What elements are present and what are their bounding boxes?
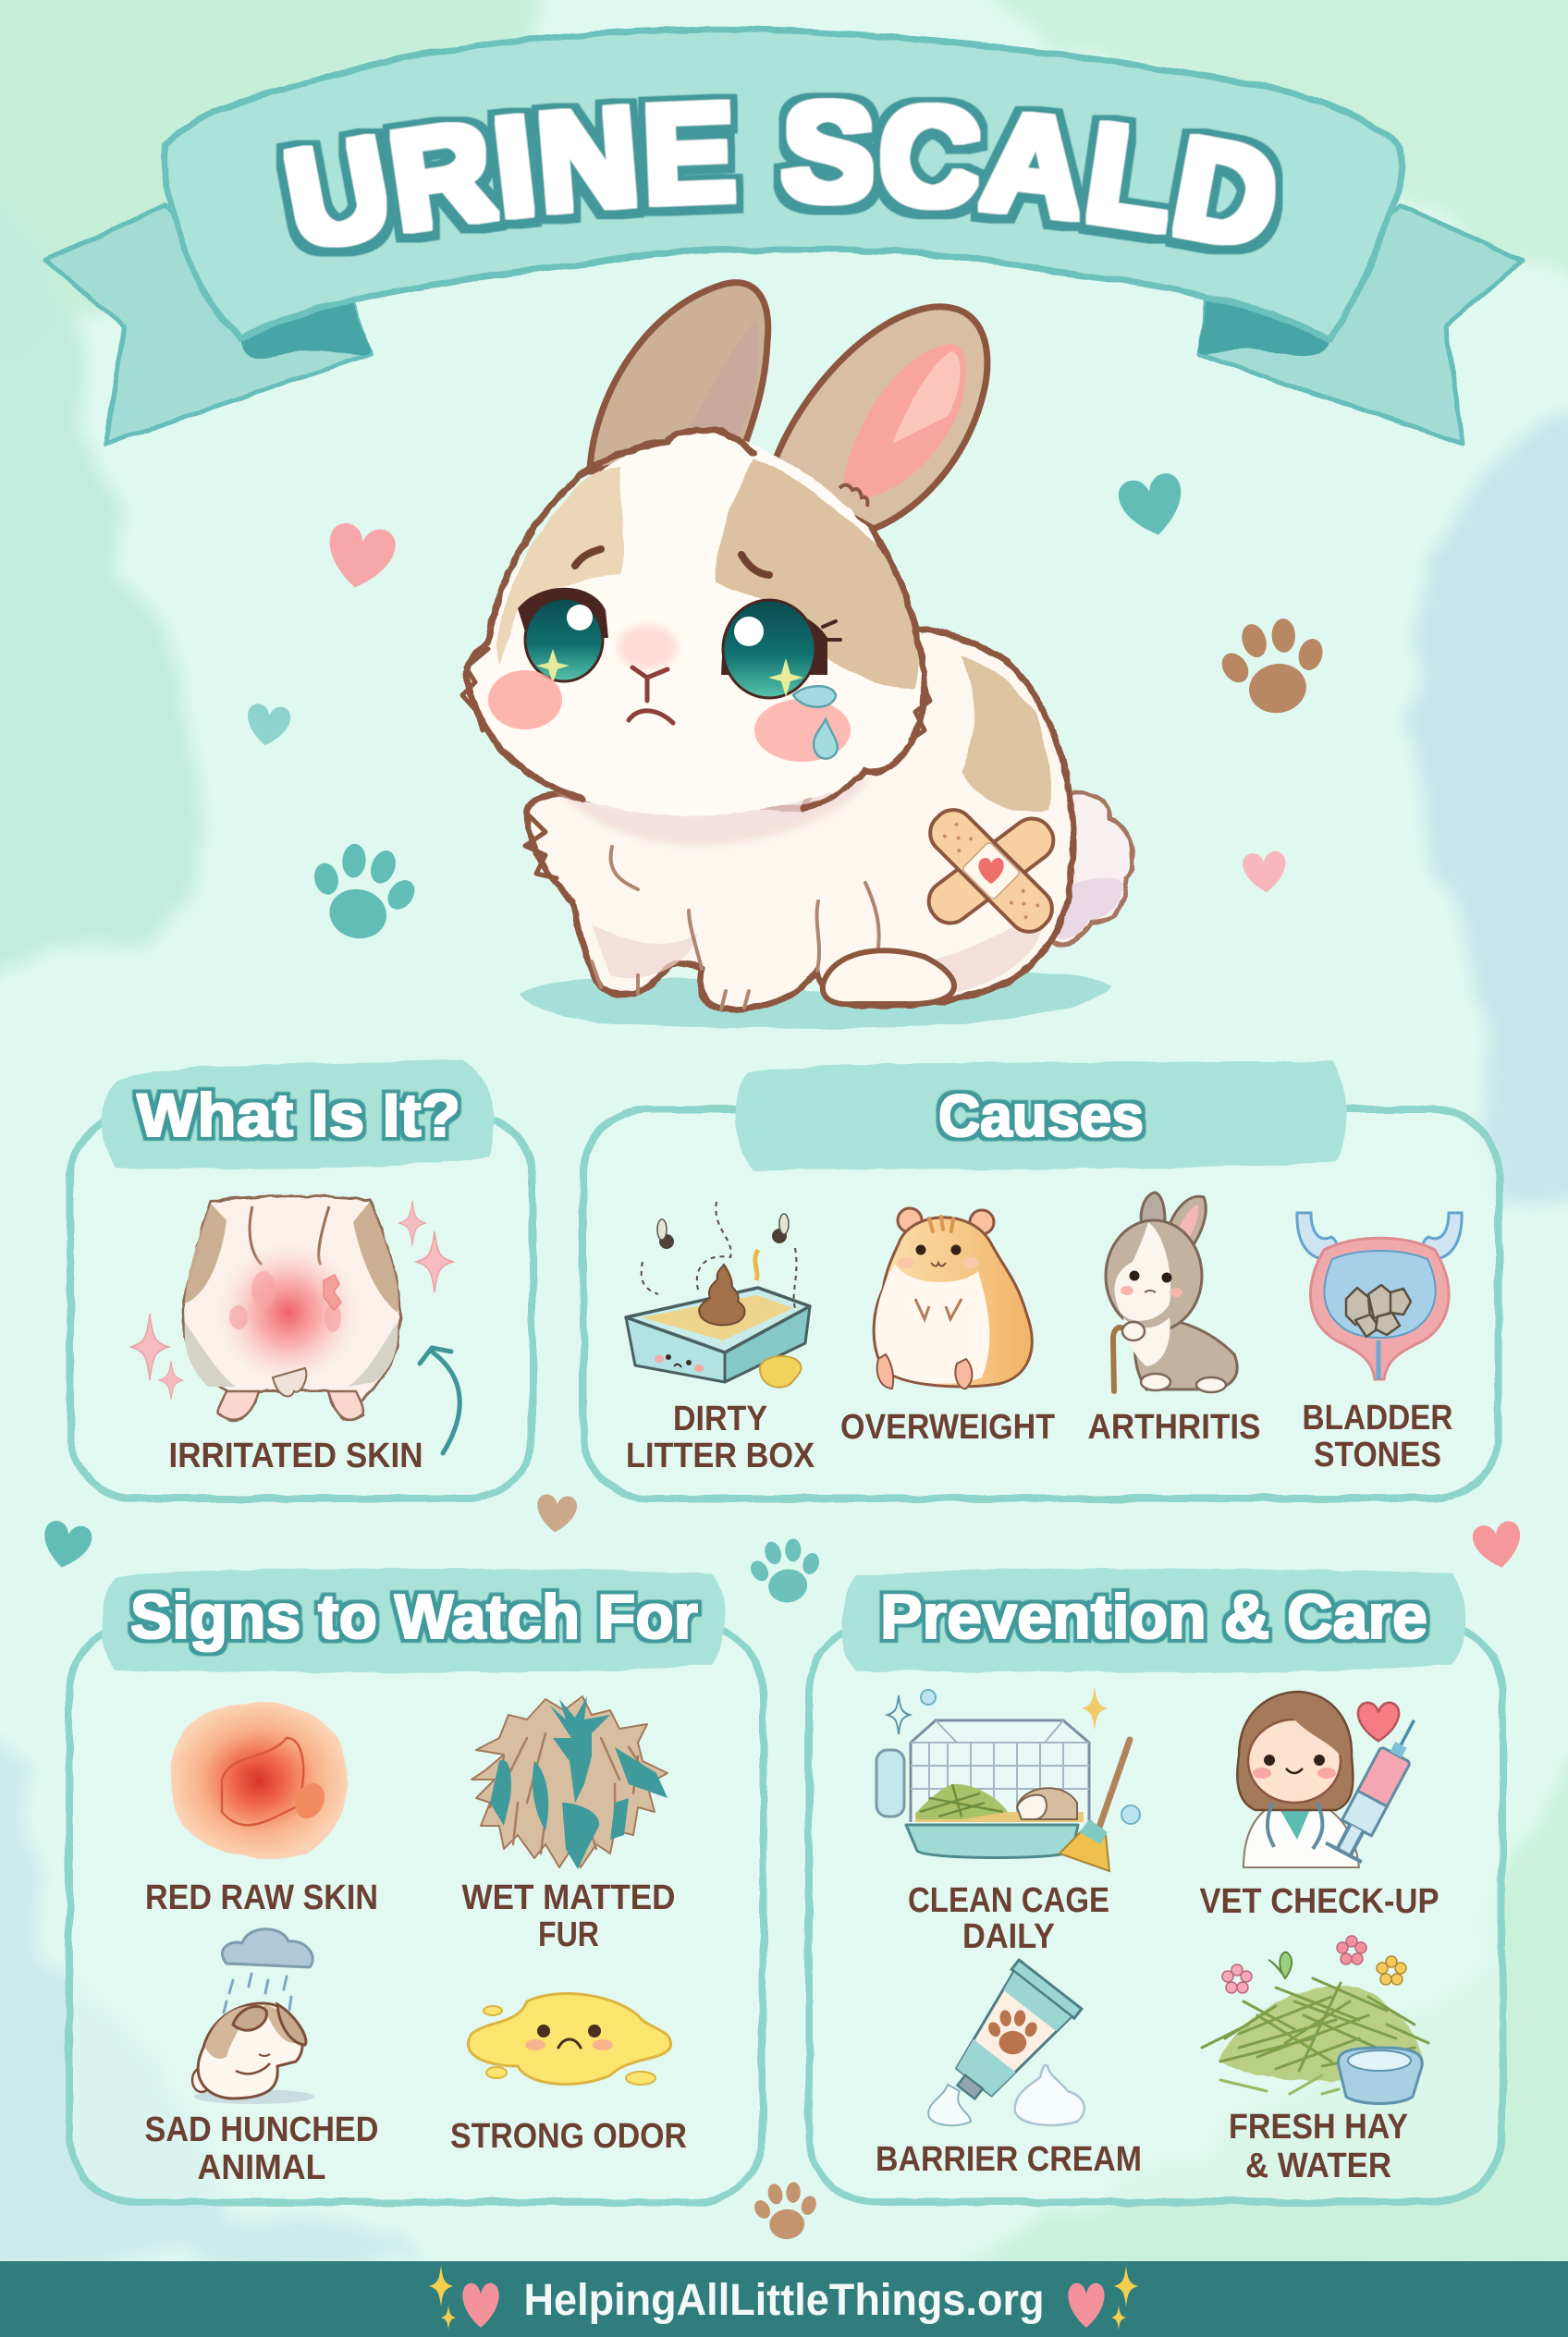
label: BLADDER [1302,1399,1453,1438]
heading ribbon [102,1059,495,1169]
heading: Signs to Watch For [130,1582,698,1652]
label: STRONG ODOR [450,2117,687,2156]
chin and chest shading [555,777,869,846]
head fill [466,433,923,815]
icon: teal paw [299,834,427,949]
panel outline [809,1625,1502,2202]
icon: center teal paw [744,1534,827,1608]
icon: small pink heart [1242,850,1288,894]
heading ribbon [841,1568,1464,1672]
icon: irritated skin rabbit underside [183,1196,400,1420]
left ear [590,283,768,471]
blush cheeks and nose glow [488,625,851,762]
ribbon right fold [1196,298,1329,357]
label: DAILY [962,1917,1055,1956]
label: LITTER BOX [626,1437,815,1475]
main sad rabbit illustration [462,283,1133,1029]
icon: dirty litter box [626,1202,810,1388]
panel: signs to watch for [69,1568,763,2202]
label: ARTHRITIS [1087,1408,1261,1447]
ribbon left fold [240,298,370,358]
ribbon main band [164,30,1401,339]
bandage [885,765,1097,977]
ground shadow [520,973,1112,1029]
icon: vet with syringe [1237,1692,1432,1867]
panel: causes [583,1061,1499,1499]
leg and chest fur lines [592,847,879,1009]
head outline [466,430,925,809]
decorative hearts and paws [38,471,1525,2242]
right ear [771,307,987,529]
panel: what is it [70,1059,533,1499]
ribbon left tail [45,205,370,444]
panel outline [69,1625,763,2202]
title: URINE SCALD [276,92,1283,257]
icon: small teal heart [244,703,292,748]
ribbon right tail [1198,205,1522,444]
nose and frown [629,667,673,723]
left cheek and neck fur [462,649,930,878]
title ribbon banner [43,26,1525,481]
head top fur tuft [668,432,749,461]
icon: clean cage [876,1686,1140,1871]
belly and leg shading [592,911,1045,994]
tears [793,686,838,759]
label: IRRITATED SKIN [168,1437,423,1475]
icon: pink heart [323,520,398,593]
label: BARRIER CREAM [876,2140,1142,2179]
label: & WATER [1245,2147,1391,2185]
eyebrows [575,549,769,575]
icon: red raw skin [171,1702,347,1859]
panel outline [583,1109,1499,1499]
icon: sad hunched rabbit [192,2003,314,2104]
icon: right heart and sparkles [1068,2265,1138,2330]
icon: brown paw [1211,610,1337,722]
icon: teal heart lower left [38,1519,94,1572]
label: VET CHECK-UP [1200,1882,1439,1921]
label: SAD HUNCHED [144,2111,379,2149]
right eye [721,600,840,698]
body [527,629,1073,1009]
icon: pink heart right [1471,1520,1525,1572]
face patch right [717,459,919,689]
face patch left [496,467,624,666]
hind foot [823,950,954,1004]
icon: sad urine puddle [468,1994,671,2085]
footer website text: HelpingAllLittleThings.org [523,2276,1045,2325]
icon: bladder stones [1297,1213,1462,1379]
label: FUR [538,1915,599,1954]
label: STONES [1314,1436,1441,1474]
heading: Causes [938,1083,1144,1149]
icon: arthritis rabbit with cane [1106,1193,1237,1392]
back beige patch [962,656,1051,812]
panel: prevention and care [809,1568,1502,2202]
icon: brown heart [535,1494,578,1534]
arrow [420,1348,459,1453]
icon: barrier cream tube [928,1960,1084,2125]
tail [1045,792,1133,944]
label: FRESH HAY [1229,2108,1408,2147]
icon: overweight hamster [874,1208,1032,1389]
heading: Prevention & Care [880,1582,1427,1652]
footer bar [0,2261,1568,2337]
label: OVERWEIGHT [840,1408,1055,1447]
heading ribbon [102,1568,725,1672]
label: CLEAN CAGE [908,1881,1109,1920]
heading ribbon [736,1061,1347,1170]
icon: wet matted fur [472,1696,668,1869]
label: DIRTY [673,1400,767,1438]
label: RED RAW SKIN [145,1878,378,1917]
panel outline [70,1114,533,1499]
label: WET MATTED [462,1878,675,1917]
icon: left heart and sparkles [429,2265,499,2330]
left eye [518,588,608,683]
icon: bottom brown paw [750,2179,822,2242]
icon: fresh hay and water bowl [1202,1936,1428,2104]
icon: teal heart [1116,471,1189,542]
heading: What Is It? [137,1081,460,1149]
icon: rain cloud [222,1929,312,2013]
label: ANIMAL [198,2148,325,2187]
icon: sparkles [131,1201,453,1400]
